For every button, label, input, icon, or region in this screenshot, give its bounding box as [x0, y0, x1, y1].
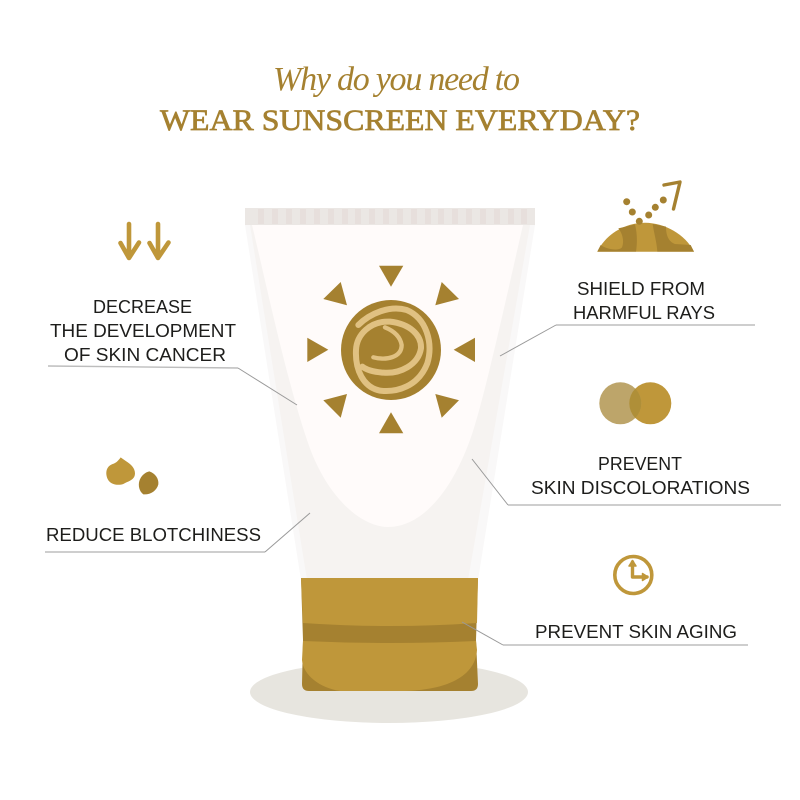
cap upper — [301, 578, 478, 626]
skin mound — [597, 223, 694, 252]
text: shield from harmful rays — [573, 278, 715, 323]
right leader line: skin aging — [462, 622, 748, 645]
title line 2: WEAR SUNSCREEN EVERYDAY? — [160, 104, 640, 137]
icon: clock — [615, 556, 652, 594]
tube shadow — [250, 661, 528, 723]
cap base — [301, 578, 478, 691]
right leader line: harmful rays — [500, 325, 755, 356]
icon: down arrows — [120, 224, 168, 258]
tube cap — [301, 578, 478, 691]
cap lower — [302, 641, 477, 691]
text: decrease skin cancer: THE DEVELOPMENT — [50, 320, 236, 341]
text: decrease skin cancer — [50, 296, 236, 365]
tube inner highlight — [252, 225, 523, 527]
deflection arrow — [664, 182, 680, 209]
text: prevent skin discolorations — [531, 453, 750, 498]
text: shield from harmful rays: HARMFUL RAYS — [573, 302, 715, 323]
title line 1: Why do you need to — [273, 61, 520, 98]
title — [160, 61, 640, 137]
rays dots — [623, 196, 667, 225]
text: decrease skin cancer: DECREASE — [93, 296, 192, 317]
text: shield from harmful rays: SHIELD FROM — [577, 278, 705, 299]
left leader line: blotchiness — [45, 513, 310, 552]
sun rays — [307, 266, 475, 433]
left leader line: skin cancer — [48, 366, 297, 405]
icon: shield from rays — [597, 182, 694, 252]
text: prevent skin discolorations: PREVENT — [598, 453, 682, 474]
right leader line: discolorations — [472, 459, 781, 505]
tube outer body — [245, 225, 535, 580]
sunscreen tube — [245, 208, 535, 691]
text: prevent skin aging: PREVENT SKIN AGING — [535, 621, 737, 642]
sun spiral — [356, 309, 429, 391]
sun disc — [341, 300, 441, 400]
icon: blotches — [106, 457, 158, 494]
text: reduce blotchiness: REDUCE BLOTCHINESS — [46, 524, 261, 545]
tube mid body — [250, 225, 530, 580]
sun icon — [307, 266, 475, 433]
mound stripes — [597, 224, 694, 252]
tube crimp band — [245, 208, 535, 225]
text: prevent skin discolorations: SKIN DISCOLORATIONS — [531, 477, 750, 498]
text: decrease skin cancer: OF SKIN CANCER — [64, 344, 226, 365]
icon: overlapping circles — [599, 382, 671, 424]
